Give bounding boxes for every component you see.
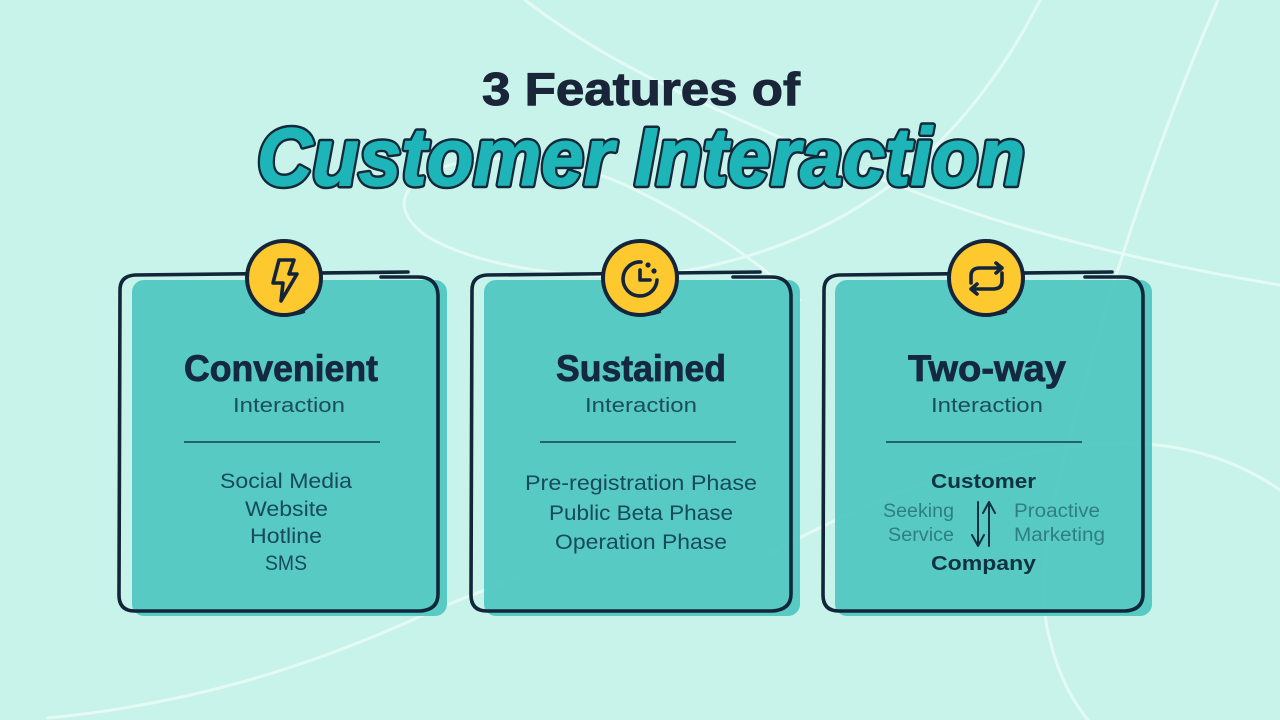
title [257, 63, 1025, 203]
heading: Customer Interaction: Customer Interaction [257, 112, 1025, 203]
label: Seeking Service: Seeking [883, 500, 954, 522]
heading: Customer Interaction: Customer Interaction [257, 112, 1025, 203]
list: channels: Social Media [220, 470, 352, 493]
label: Proactive Marketing: Proactive [1014, 500, 1100, 522]
panel: Sustained [471, 241, 800, 616]
heading: Convenient: Convenient [184, 348, 378, 389]
icon: lightning bolt [247, 241, 321, 315]
label: Seeking Service [883, 500, 954, 546]
list: phases: Pre-registration Phase [525, 472, 757, 495]
panel: Convenient [119, 241, 447, 616]
label: Company: Company [931, 552, 1037, 575]
label: Customer: Customer [931, 470, 1036, 493]
icon: clock [603, 241, 677, 315]
list: channels: SMS [265, 552, 307, 575]
panel: Two-way [823, 241, 1152, 616]
label: Seeking Service: Service [888, 524, 954, 546]
list: channels [220, 470, 352, 575]
list: channels: Hotline [250, 525, 322, 548]
arrows: two-way exchange [972, 502, 995, 546]
list: phases: Operation Phase [555, 531, 727, 554]
label: Proactive Marketing [1014, 500, 1105, 546]
subheading: Interaction: Interaction [585, 394, 697, 417]
heading: Two-way: Two-way [908, 348, 1066, 389]
list: channels: Website [245, 498, 328, 521]
list: phases [525, 472, 757, 554]
subheading: Interaction: Interaction [233, 394, 345, 417]
icon: repeat arrows [949, 241, 1023, 315]
label: Proactive Marketing: Marketing [1014, 524, 1105, 546]
list: phases: Public Beta Phase [549, 502, 733, 525]
subheading: Interaction: Interaction [931, 394, 1043, 417]
heading: 3 Features of: 3 Features of [482, 63, 801, 115]
heading: Sustained: Sustained [556, 348, 726, 389]
